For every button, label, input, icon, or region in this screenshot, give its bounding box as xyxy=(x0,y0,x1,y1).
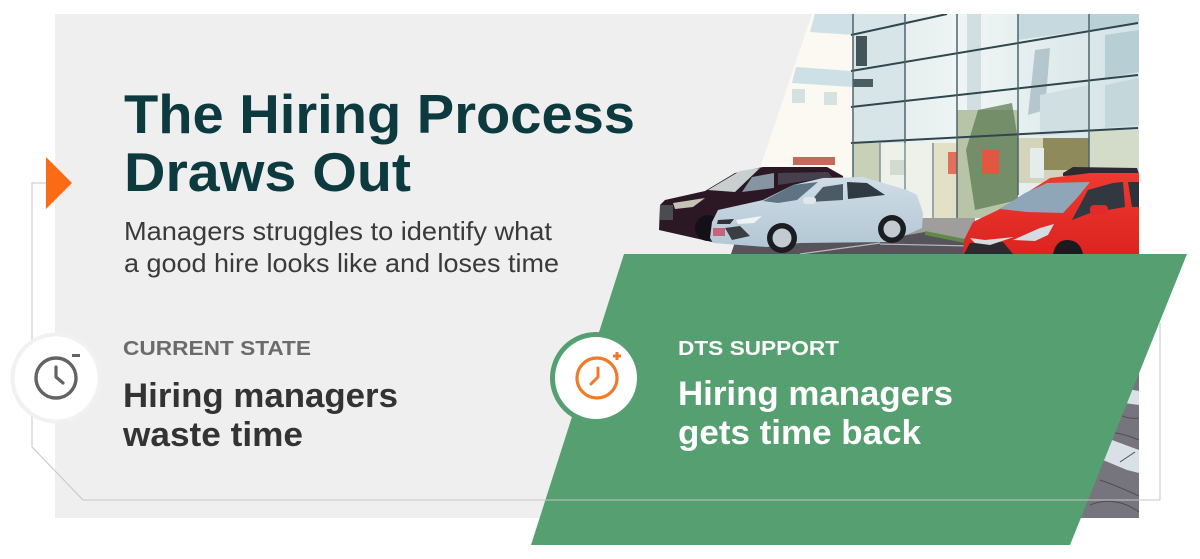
icon: clock minus xyxy=(12,334,100,422)
heading: Draws Out xyxy=(124,141,411,203)
DTS support column: DTS SUPPORT xyxy=(678,337,840,360)
pavement with white stripes xyxy=(1080,374,1139,518)
DTS support column: gets time back xyxy=(678,414,921,452)
subtitle text: Managers struggles to identify what xyxy=(124,216,553,246)
car: dark suv xyxy=(659,167,845,242)
DTS support column xyxy=(678,337,953,452)
current state column xyxy=(122,337,398,454)
DTS support column: Hiring managers xyxy=(678,375,953,413)
car: silver sedan xyxy=(710,177,923,253)
heading xyxy=(124,83,635,203)
heading: The Hiring Process xyxy=(124,83,635,145)
panel: green DTS support xyxy=(531,254,1187,545)
arrow: orange marker xyxy=(46,157,72,209)
car: red hatchback xyxy=(963,167,1139,254)
photo: glass building and pavement xyxy=(725,14,1145,524)
current state column: Hiring managers xyxy=(123,377,398,415)
subtitle text: a good hire looks like and loses time xyxy=(124,248,559,278)
subtitle text xyxy=(124,216,559,278)
connector line xyxy=(32,183,1160,500)
current state column: CURRENT STATE xyxy=(123,337,311,360)
icon: clock plus xyxy=(552,334,640,422)
panel: grey background xyxy=(55,14,1055,518)
current state column: waste time xyxy=(122,416,303,454)
